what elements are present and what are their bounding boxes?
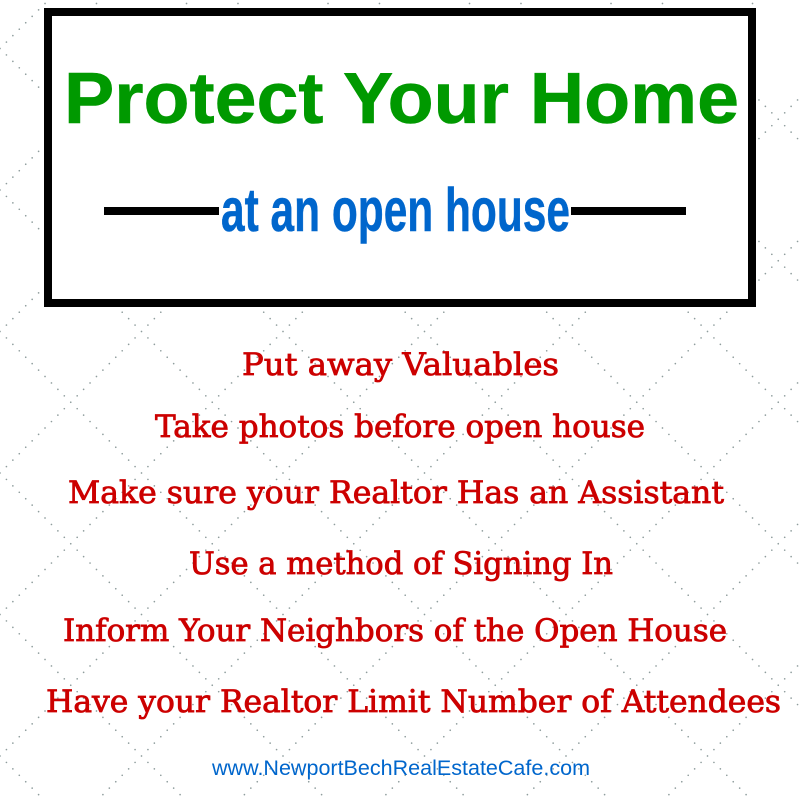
tips list: [46, 347, 781, 720]
tip 1: Put away Valuables: [242, 347, 559, 383]
tip 2: Take photos before open house: [155, 409, 645, 445]
tip 3: Make sure your Realtor Has an Assistant: [68, 475, 725, 511]
tip 6: Have your Realtor Limit Number of Attendees: [46, 684, 781, 720]
title: Protect Your Home: Protect Your Home: [64, 59, 739, 139]
tip 4: Use a method of Signing In: [189, 546, 613, 582]
website footer: www.NewportBechRealEstateCafe.com: [211, 757, 590, 780]
subtitle with side rules: at an open house: [221, 176, 570, 244]
tip 5: Inform Your Neighbors of the Open House: [63, 613, 727, 649]
title box: [48, 12, 752, 303]
